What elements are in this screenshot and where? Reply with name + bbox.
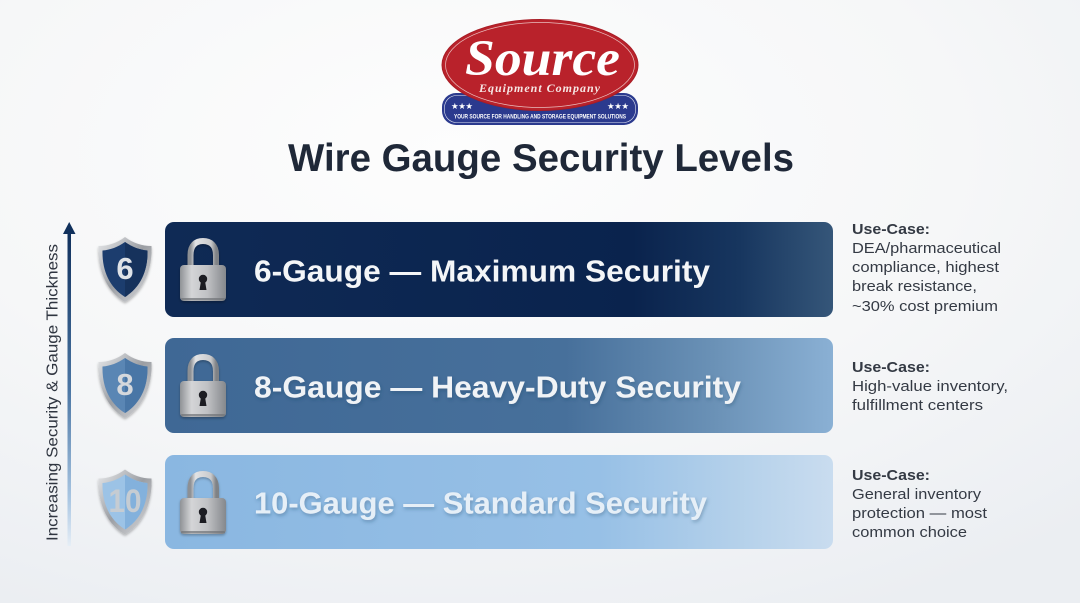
icon: shield 8: 8 (116, 367, 134, 402)
bar: 10-gauge (165, 455, 833, 549)
use-case: 10-gauge: General inventory (852, 486, 982, 503)
use-case: 10-gauge: common choice (852, 524, 967, 541)
use-case: 8-gauge: Use-Case: (852, 359, 930, 376)
logo: Source Equipment Company (442, 20, 638, 125)
icon: shield 10: 10 (108, 483, 142, 519)
logo oval: Source (465, 31, 620, 87)
use-case: 6-gauge (852, 221, 1001, 315)
icon: shield 6: 6 (116, 251, 134, 286)
panel: 10-gauge (98, 455, 833, 549)
use-case: 6-gauge: Use-Case: (852, 221, 930, 238)
panel: 8-gauge (98, 338, 833, 433)
logo banner: ★★★ (451, 101, 473, 111)
logo banner: YOUR SOURCE FOR HANDLING AND STORAGE EQUIPMENT SOLUTIONS (454, 114, 626, 120)
icon: shield 6 (98, 237, 152, 302)
axis label: Increasing Security & Gauge Thickness (44, 244, 62, 541)
use-case: 8-gauge (852, 359, 1008, 414)
use-case: 10-gauge: protection — most (852, 505, 988, 522)
logo oval: Equipment Company (478, 81, 601, 95)
use-case: 10-gauge (852, 467, 988, 541)
use-case: 6-gauge: ~30% cost premium (852, 298, 998, 315)
logo banner (442, 93, 638, 125)
use-case: 10-gauge: Use-Case: (852, 467, 930, 484)
use-case: 6-gauge: compliance, highest (852, 259, 1000, 276)
logo oval (442, 20, 638, 110)
use-case: 8-gauge: High-value inventory, (852, 378, 1008, 395)
bar: 8-gauge (165, 338, 833, 433)
label: 6-gauge: 6-Gauge — Maximum Security (254, 254, 710, 288)
use-case: 6-gauge: break resistance, (852, 278, 977, 295)
icon: padlock 6 (180, 241, 226, 301)
bar: 6-gauge (165, 222, 833, 317)
icon: shield 8 (98, 353, 152, 418)
label: 8-gauge: 8-Gauge — Heavy-Duty Security (254, 370, 741, 404)
use-case: 8-gauge: fulfillment centers (852, 397, 983, 414)
use-case: 6-gauge: DEA/pharmaceutical (852, 240, 1001, 257)
icon: padlock 8 (180, 357, 226, 417)
axis arrow (63, 222, 76, 546)
logo banner: ★★★ (607, 101, 629, 111)
panel: 6-gauge (98, 222, 833, 317)
title: Wire Gauge Security Levels (288, 137, 794, 180)
label: 10-gauge: 10-Gauge — Standard Security (254, 486, 707, 520)
icon: shield 10 (98, 470, 152, 534)
icon: padlock 10 (180, 474, 226, 534)
